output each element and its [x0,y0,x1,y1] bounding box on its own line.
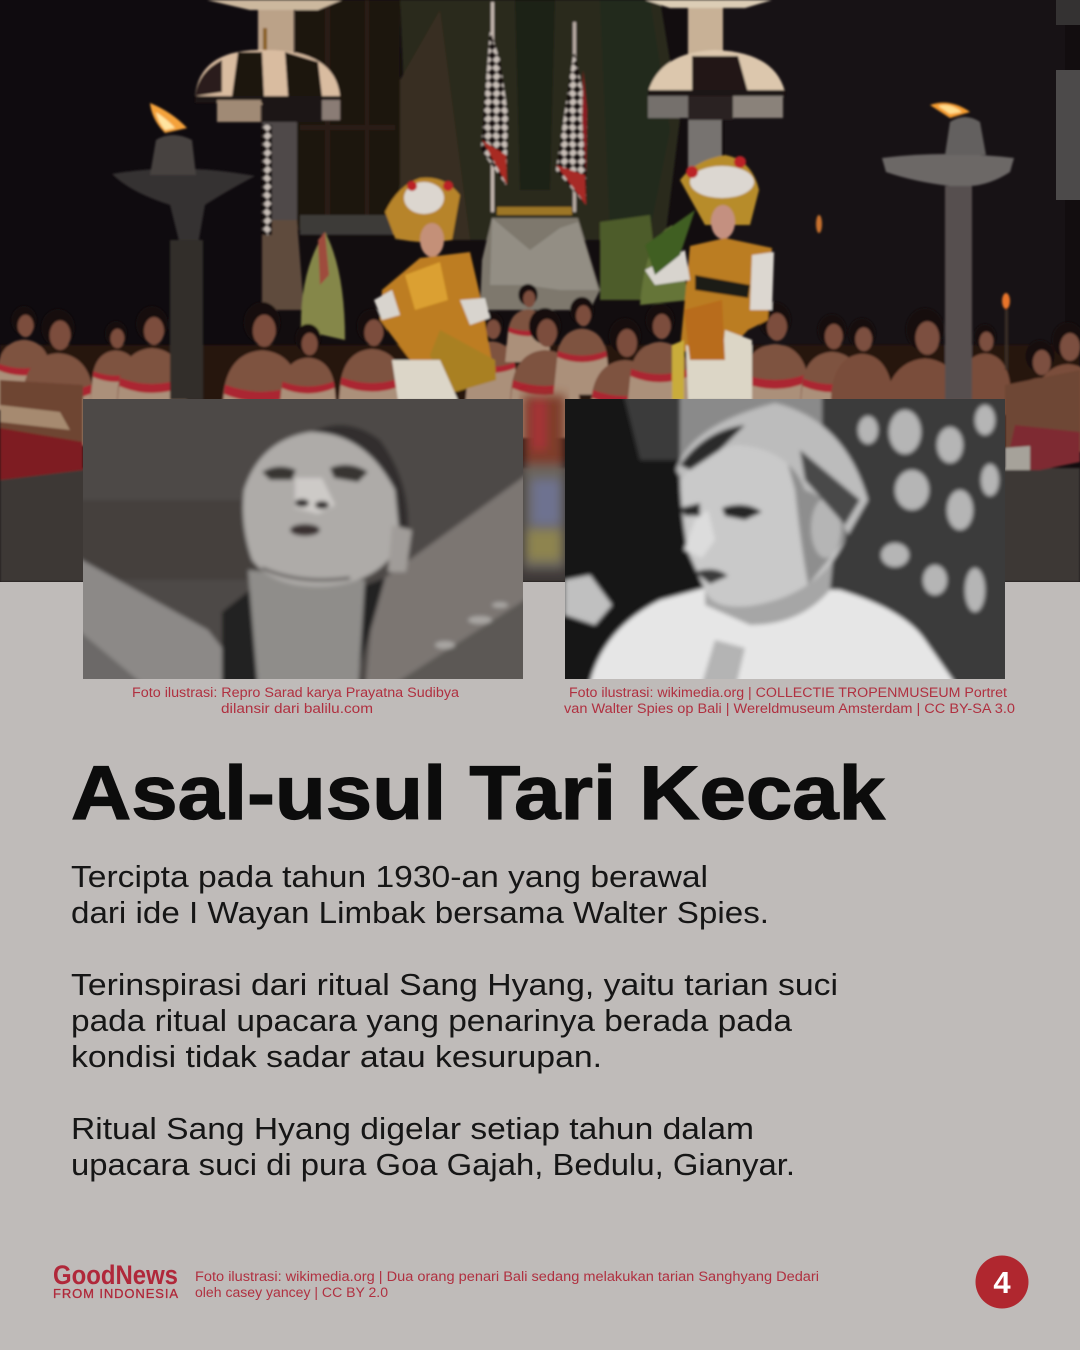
body text [71,859,838,1182]
body text: Terinspirasi dari ritual Sang Hyang, yaitu tarian suci [71,967,838,1002]
portrait photo: Walter Spies [565,399,1005,679]
photo credit left: Foto ilustrasi: Repro Sarad karya Prayatna Sudibya [132,685,460,700]
photo credit right: Foto ilustrasi: wikimedia.org | COLLECTIE TROPENMUSEUM Portret [569,685,1007,700]
photo credit left: dilansir dari balilu.com [221,701,373,716]
lower crowd and stage floor [0,370,1080,582]
foliage highlights [858,405,999,612]
torch left [112,103,255,400]
body text: Ritual Sang Hyang digelar setiap tahun dalam [71,1111,754,1146]
title: Asal-usul Tari Kecak [71,751,886,836]
photo credit right [564,685,1015,716]
face [680,440,845,607]
white shirt [586,585,957,679]
footer photo credit [195,1269,819,1300]
neck [248,570,365,690]
body text: kondisi tidak sadar atau kesurupan. [71,1039,602,1074]
face [243,432,400,586]
page number badge [976,1256,1028,1308]
light wedge behind shoulder [364,475,523,679]
photo credit left [132,685,460,716]
footer photo credit: Foto ilustrasi: wikimedia.org | Dua orang penari Bali sedang melakukan tarian Sanghyang Dedari [195,1269,819,1284]
logo: GoodNews from Indonesia: GoodNews [53,1260,178,1290]
page number badge: 4 [993,1265,1011,1300]
photo credit right: van Walter Spies op Bali | Wereldmuseum Amsterdam | CC BY-SA 3.0 [564,701,1015,716]
flowers [565,575,612,625]
hero photo: Balinese dance performance [0,0,1080,582]
jacket [83,558,226,679]
crowd of seated kecak dancers [0,284,1080,464]
body text: dari ide I Wayan Limbak bersama Walter Spies. [71,895,769,930]
ceremonial flags [481,2,587,212]
portrait photo: I Wayan Limbak [83,399,523,679]
pillars and parasols [195,0,785,310]
collar [220,592,258,679]
body text: pada ritual upacara yang penarinya berada pada [71,1003,793,1038]
offering cloth and palm decorations [301,207,690,340]
body text: Tercipta pada tahun 1930-an yang berawal [71,859,708,894]
logo: GoodNews from Indonesia: FROM INDONESIA [53,1286,178,1301]
dancer right [645,155,774,400]
neck [703,561,836,627]
hair [676,403,868,535]
body text: upacara suci di pura Goa Gajah, Bedulu, Gianyar. [71,1147,795,1182]
dancer left [374,178,496,400]
footer photo credit: oleh casey yancey | CC BY 2.0 [195,1285,388,1300]
vegetation backdrop [295,0,680,240]
torch right [816,103,1014,400]
head and hair [318,424,409,528]
logo: GoodNews from Indonesia [53,1260,178,1301]
